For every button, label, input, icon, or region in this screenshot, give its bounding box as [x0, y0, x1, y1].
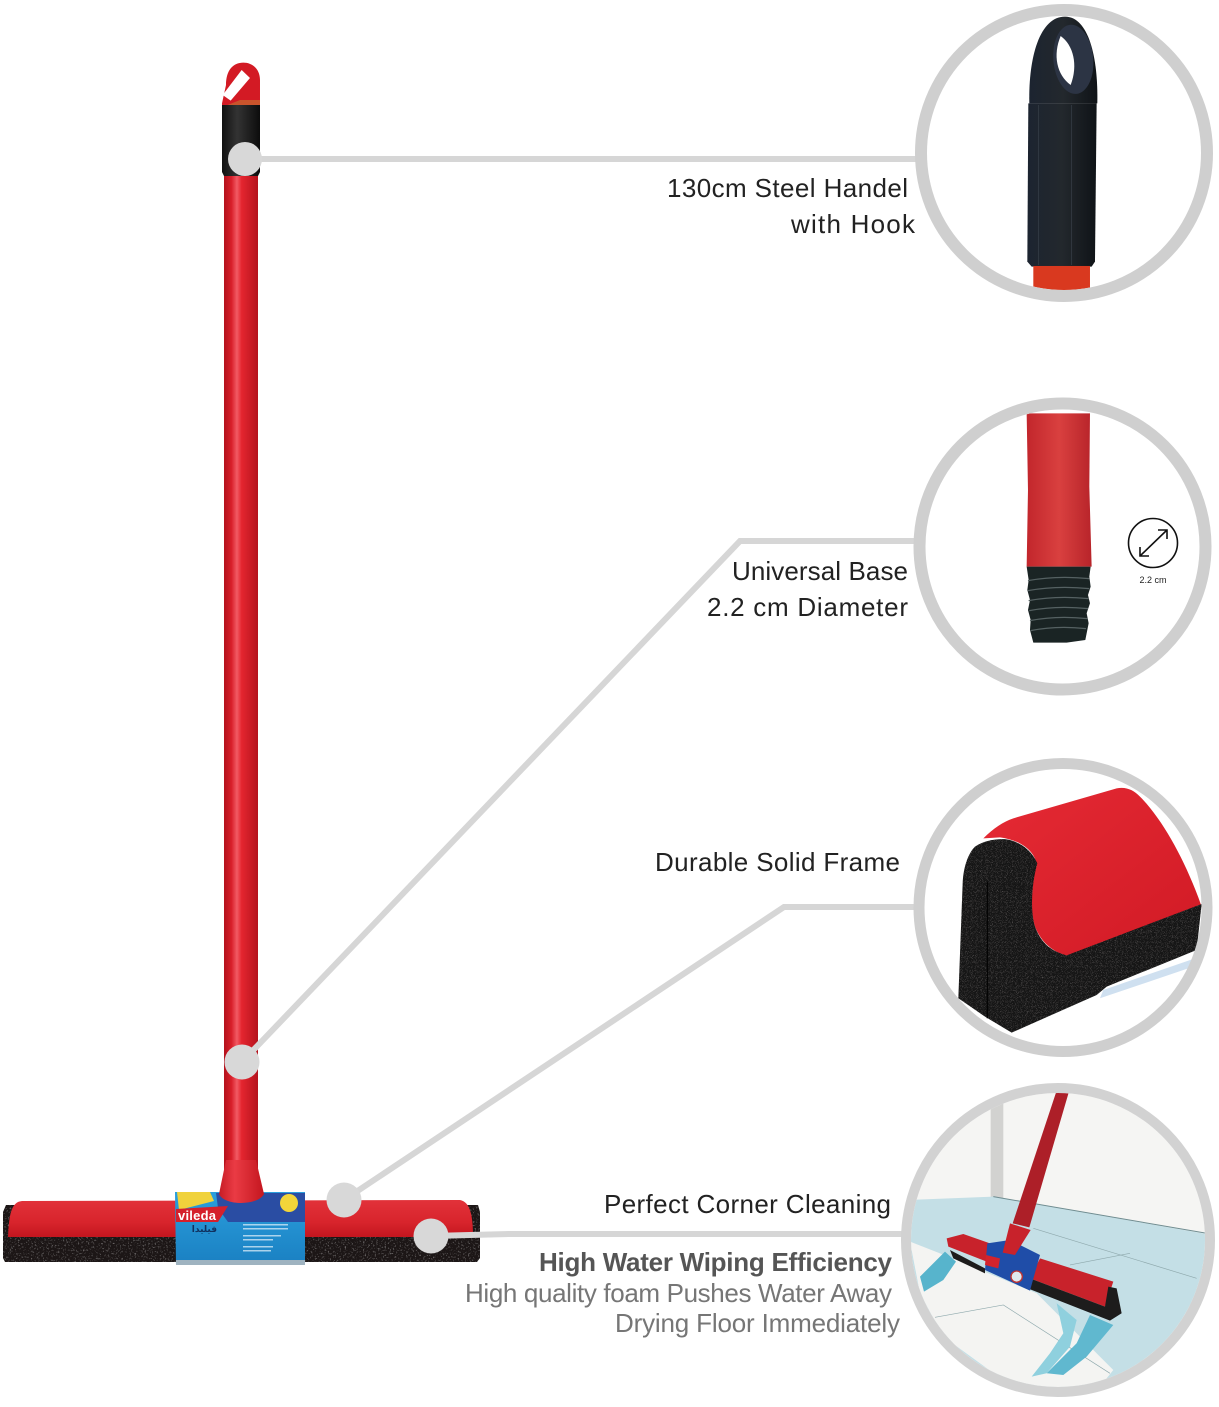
- label: universal base: Universal Base: [732, 556, 908, 586]
- label: water wiping: Drying Floor Immediately: [615, 1308, 900, 1338]
- label: water wiping: High quality foam Pushes Water Away: [465, 1278, 892, 1308]
- barcode strip: [176, 1260, 305, 1265]
- diameter label: 2.2 cm: [1139, 575, 1167, 585]
- bullet lines: [243, 1224, 288, 1252]
- foam blade: [3, 1205, 480, 1262]
- marker dot: handle: [228, 142, 262, 176]
- brand name: vileda: [178, 1208, 217, 1223]
- label: handle: [667, 173, 916, 239]
- red steel handle: [224, 176, 258, 1171]
- panel: cleaning scene: [900, 1080, 1219, 1407]
- label: handle: 130cm Steel Handel: [667, 173, 908, 203]
- seal: [280, 1194, 298, 1212]
- marker dot: base: [224, 1044, 260, 1080]
- packaging label: [175, 1160, 305, 1265]
- socket: [219, 1160, 264, 1203]
- label: durable frame: Durable Solid Frame: [655, 847, 900, 877]
- ring: [919, 764, 1207, 1052]
- detail image: foam and red frame: [958, 788, 1202, 1033]
- detail image: threaded base: [1027, 413, 1092, 643]
- leader line: frame: [344, 907, 916, 1200]
- ring: [921, 10, 1207, 296]
- ring: [906, 1088, 1210, 1392]
- hook: [222, 63, 260, 107]
- label: handle: with Hook: [790, 209, 916, 239]
- leader line: foam: [431, 1234, 903, 1236]
- label: universal base: [707, 556, 908, 622]
- icon: diameter: [1128, 518, 1178, 568]
- detail image: squeegee on wet floor: [911, 1093, 1205, 1387]
- detail image: black hook grip: [1027, 17, 1097, 293]
- label: water wiping: High Water Wiping Efficiency: [539, 1247, 893, 1277]
- label: corner cleaning: Perfect Corner Cleaning: [604, 1189, 891, 1219]
- panel: hook detail: [921, 10, 1207, 296]
- panel: base detail: [920, 404, 1206, 690]
- arabic brand: فيليدا: [192, 1224, 217, 1234]
- label: water wiping: [465, 1247, 900, 1338]
- leader line: base: [242, 541, 916, 1062]
- panel: frame detail: [919, 764, 1207, 1052]
- ring: [920, 404, 1206, 690]
- black grip: [222, 105, 260, 178]
- marker dot: frame: [326, 1182, 362, 1218]
- marker dot: foam: [414, 1218, 448, 1254]
- label: universal base: 2.2 cm Diameter: [707, 592, 908, 622]
- red frame: [8, 1200, 473, 1237]
- product: full squeegee broom: [3, 63, 480, 1265]
- leader line: handle: [245, 156, 916, 162]
